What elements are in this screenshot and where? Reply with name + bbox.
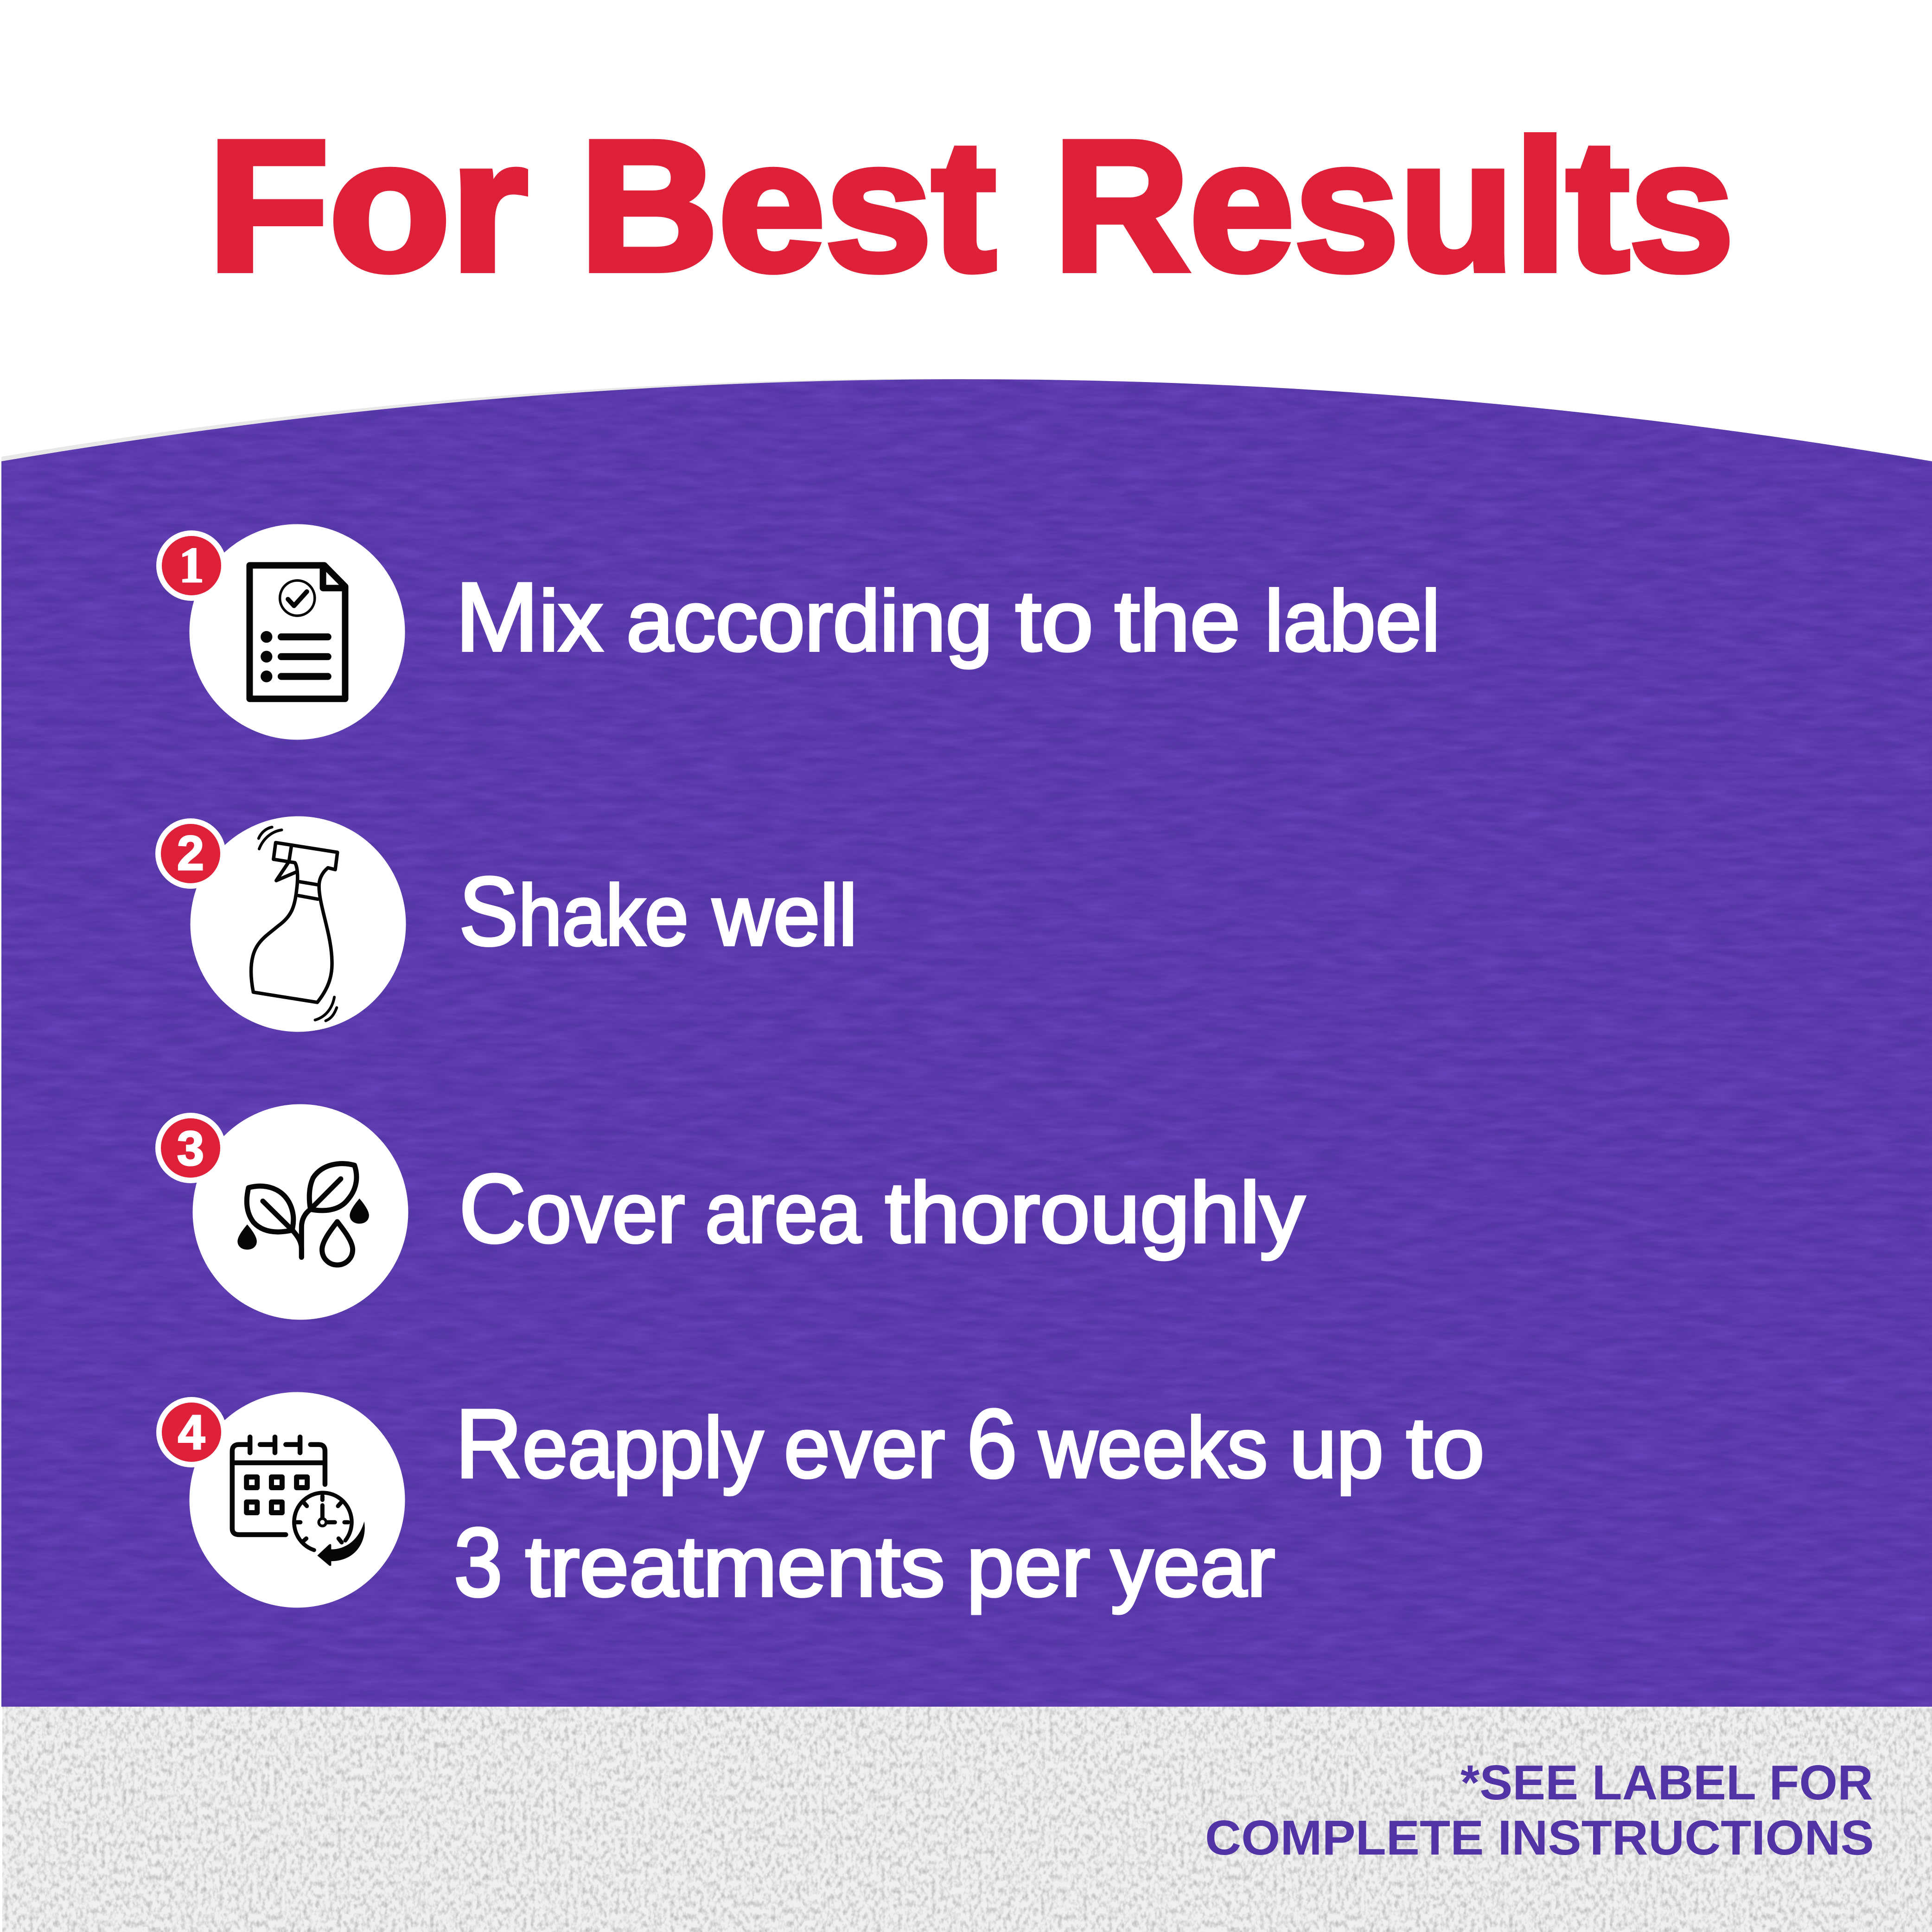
step 4 text: Reapply	[455, 1389, 763, 1498]
step 1 text: label	[1265, 574, 1440, 669]
step 3 text: area	[705, 1165, 861, 1261]
step 3 number badge: 3	[177, 1122, 204, 1176]
step 1 number badge	[156, 530, 227, 601]
step 3 text: thoroughly	[885, 1165, 1305, 1261]
step 2 text: Shake	[459, 857, 689, 966]
step 1 white circle	[189, 524, 405, 740]
step 4 text: per	[967, 1519, 1090, 1614]
step 4 text: to	[1406, 1400, 1485, 1496]
step 4 text: year	[1111, 1519, 1275, 1614]
step 1 text	[455, 562, 1440, 671]
step 2 number badge: 2	[177, 826, 204, 880]
panel: textured footer background	[2, 1707, 1932, 1932]
step 1 text: Mix	[455, 562, 603, 671]
title: Results	[1053, 102, 1734, 309]
step 1 text: to	[1015, 574, 1093, 669]
step 4	[156, 1392, 405, 1608]
step 4 white circle	[189, 1392, 405, 1608]
step 4 number badge	[156, 1397, 227, 1467]
step 3 number badge	[155, 1113, 226, 1183]
step 4 text	[454, 1389, 1485, 1617]
step 1	[156, 524, 405, 740]
step 4 text: treatments	[525, 1519, 945, 1614]
icon: leaves and water drops	[237, 1164, 369, 1265]
curved edge highlight	[1, 379, 966, 464]
footnote	[1205, 1755, 1874, 1865]
step 3 white circle	[193, 1104, 408, 1320]
step 4 text: 3	[454, 1508, 503, 1617]
step 2	[155, 816, 406, 1032]
footnote: COMPLETE INSTRUCTIONS	[1205, 1811, 1874, 1865]
step 4 text: 6	[967, 1389, 1017, 1498]
icon: spray bottle	[251, 827, 338, 1021]
step 3 text	[459, 1154, 1305, 1263]
title	[208, 102, 1734, 309]
step 2 text: well	[712, 868, 857, 963]
step 1 text: the	[1115, 574, 1240, 669]
panel: purple background	[1, 379, 1932, 1707]
step 2 number badge	[155, 818, 226, 889]
step 3	[155, 1104, 408, 1320]
step 4 text: up	[1289, 1400, 1384, 1496]
title: For	[208, 102, 528, 309]
step 4 number badge: 4	[178, 1405, 205, 1460]
step 3 text: Cover	[459, 1154, 685, 1263]
step 4 text: ever	[784, 1400, 945, 1496]
icon: document with checkmark	[249, 565, 345, 699]
step 1 number badge: 1	[179, 538, 204, 593]
step 2 white circle	[190, 816, 406, 1032]
step 1 text: according	[626, 574, 993, 669]
step 4 text: weeks	[1039, 1400, 1268, 1496]
footnote: *SEE LABEL FOR	[1460, 1755, 1873, 1810]
icon: calendar with clock and arrow	[232, 1437, 365, 1566]
step 2 text	[459, 857, 857, 966]
title: Best	[580, 102, 996, 309]
